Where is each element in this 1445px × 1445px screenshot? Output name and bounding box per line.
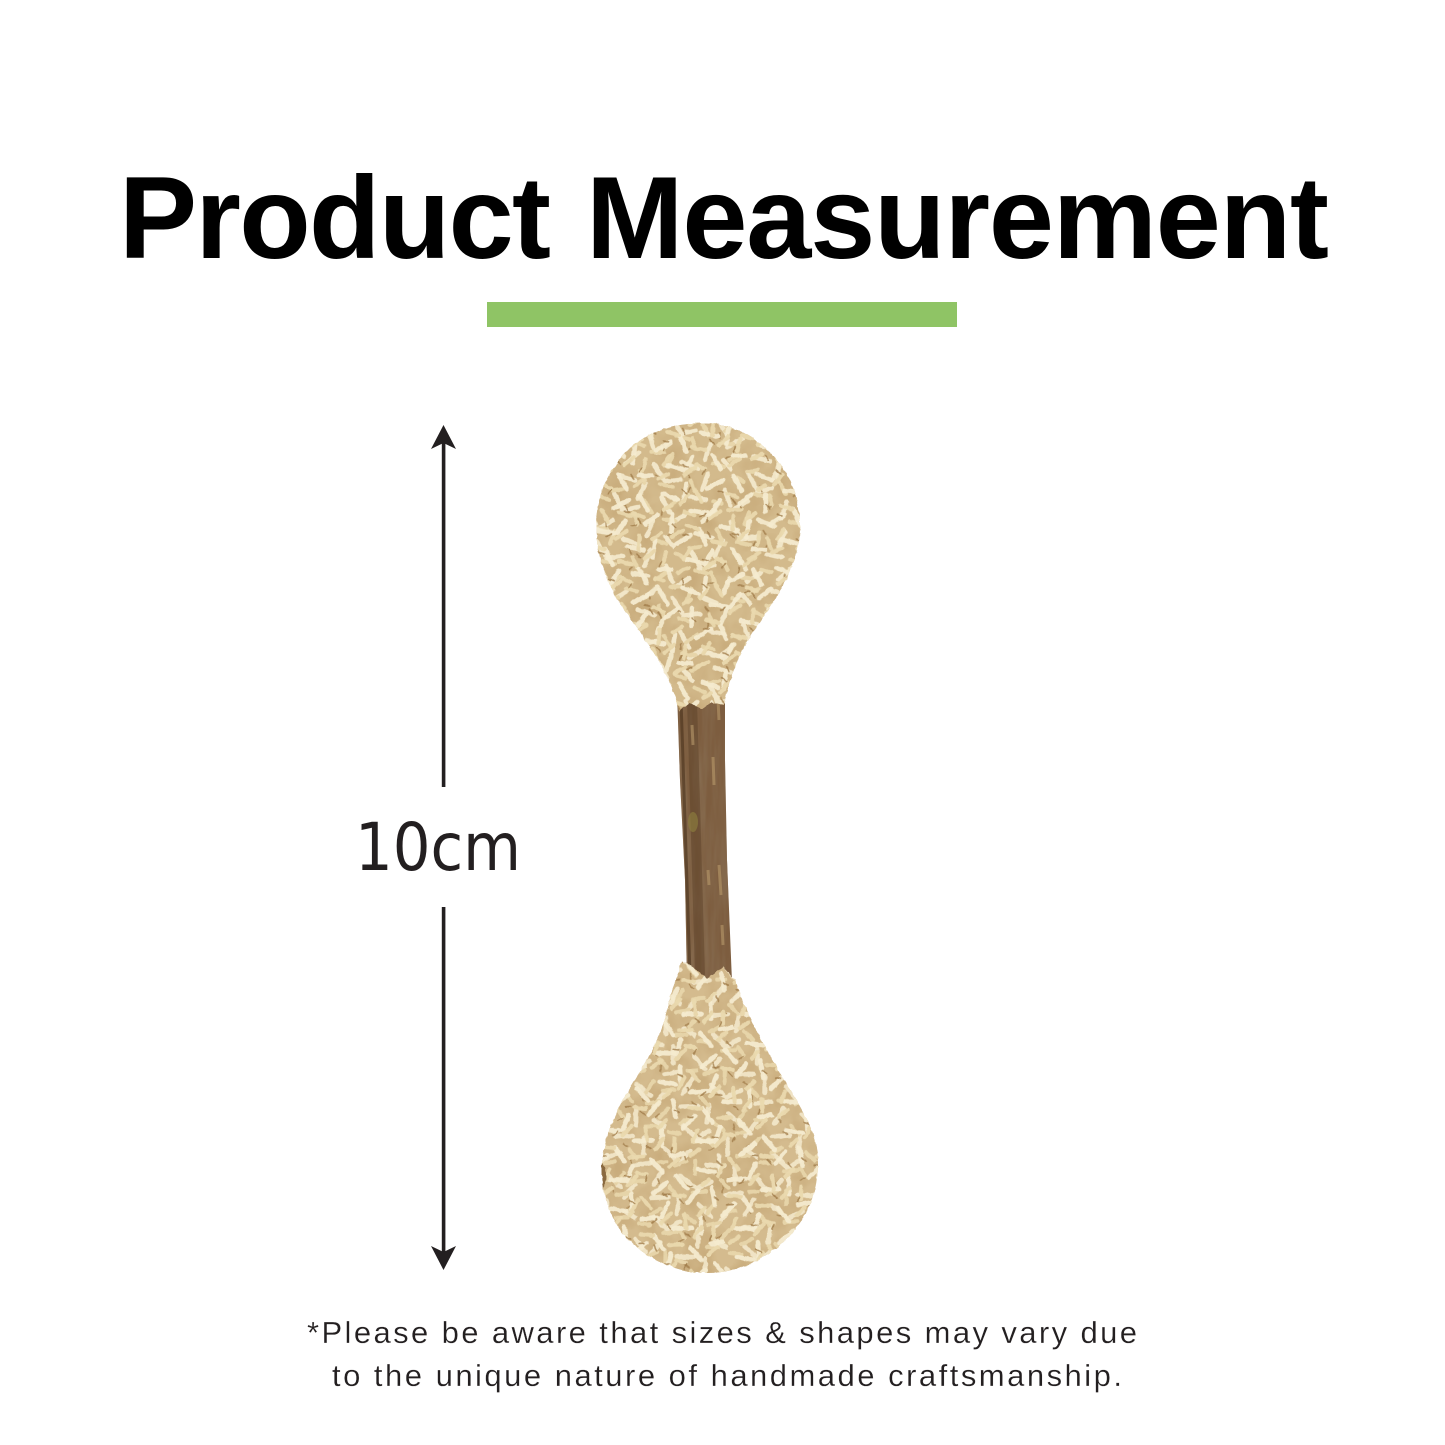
title: Product	[119, 152, 551, 283]
disclaimer note	[307, 1315, 1137, 1393]
product: catnip dumbbell	[596, 422, 818, 1273]
wooden stick	[678, 700, 732, 979]
dimension arrow: lower segment	[431, 907, 456, 1270]
disclaimer note: *Please be aware that sizes & shapes may vary due	[307, 1315, 1137, 1350]
dimension label: 10cm	[355, 809, 521, 886]
green accent bar	[487, 302, 957, 327]
title	[119, 152, 1329, 283]
dimension arrow: upper segment	[431, 425, 456, 787]
bottom bulb	[601, 962, 818, 1273]
disclaimer note: to the unique nature of handmade craftsmanship.	[332, 1358, 1122, 1393]
title: Measurement	[586, 152, 1329, 283]
top bulb	[596, 422, 800, 712]
